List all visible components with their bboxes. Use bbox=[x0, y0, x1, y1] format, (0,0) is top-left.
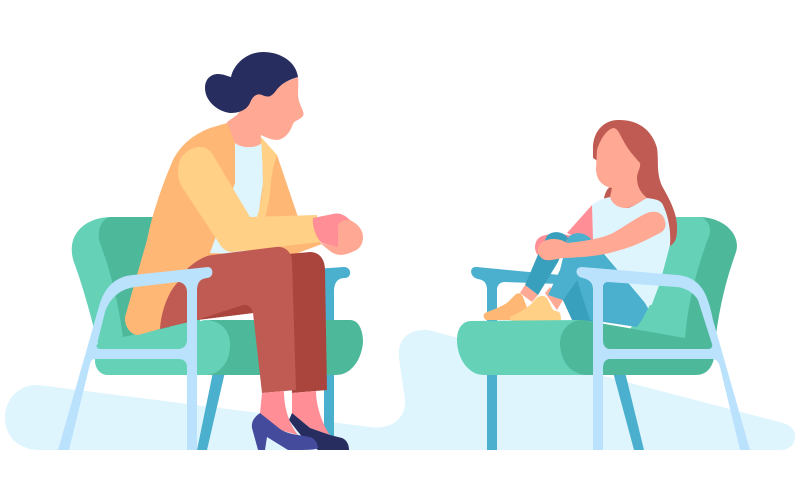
seat front, right chair bbox=[457, 320, 600, 375]
left armchair, rear parts bbox=[72, 217, 363, 450]
rear leg, right chair bbox=[613, 372, 644, 450]
arm bbox=[178, 147, 320, 252]
right armchair, rear parts bbox=[471, 217, 737, 450]
seat, left chair bbox=[95, 320, 363, 375]
front trouser leg bbox=[160, 247, 296, 393]
trouser shadow bbox=[197, 305, 253, 320]
seat shadow, right chair bbox=[560, 320, 600, 375]
front ankle bbox=[545, 287, 563, 310]
woman bbox=[125, 52, 363, 450]
rear arm and post, left chair bbox=[300, 267, 350, 450]
front shoe bbox=[252, 413, 318, 450]
back cushion, right chair bbox=[640, 217, 737, 352]
thigh shadow bbox=[563, 280, 590, 325]
hand, back bbox=[313, 213, 350, 248]
back cushion, left chair bbox=[72, 217, 200, 345]
rear arm and post, right chair bbox=[471, 267, 560, 450]
left armchair, front frame bbox=[58, 267, 212, 450]
rear ankle bbox=[520, 285, 538, 302]
coat bbox=[125, 123, 322, 335]
lapel bbox=[256, 137, 277, 219]
seat back front sliver, right chair bbox=[637, 300, 688, 338]
arm bbox=[538, 212, 666, 260]
rear shoe bbox=[484, 293, 528, 320]
rear ankle bbox=[292, 391, 330, 435]
front frame, right chair bbox=[576, 267, 750, 450]
background blob bbox=[5, 330, 795, 450]
hair bbox=[205, 52, 298, 113]
rear trouser leg bbox=[288, 252, 327, 393]
front shoe bbox=[510, 296, 561, 321]
rear shoe bbox=[289, 413, 349, 450]
neck and face bbox=[227, 77, 304, 148]
hand, front bbox=[320, 220, 363, 255]
under thigh shadow bbox=[563, 280, 600, 325]
seat dark part, right chair bbox=[582, 320, 714, 375]
right armchair, seat and front frame bbox=[457, 267, 750, 450]
rear leg, left chair bbox=[197, 372, 225, 450]
back front, right chair bbox=[630, 217, 710, 338]
girl bbox=[484, 120, 677, 327]
shirt bbox=[592, 197, 670, 312]
back inner, left chair bbox=[99, 217, 170, 337]
hair bbox=[593, 120, 677, 246]
rear leg bbox=[525, 232, 568, 295]
face and neck bbox=[596, 128, 647, 208]
back arm and hand bbox=[535, 205, 593, 258]
shirt bbox=[210, 143, 290, 254]
seat front, left chair bbox=[95, 320, 230, 375]
front ankle bbox=[260, 391, 298, 435]
front leg bbox=[548, 233, 649, 327]
